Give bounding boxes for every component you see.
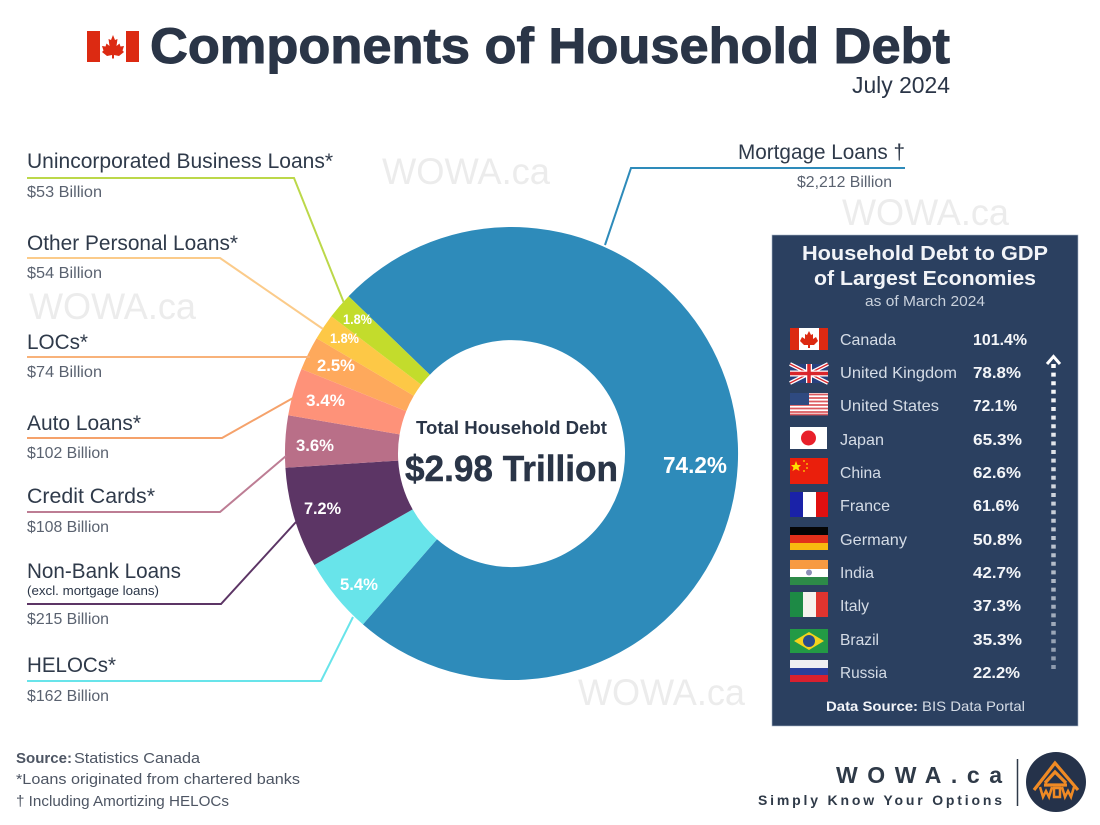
label: other personal loans xyxy=(27,232,323,329)
percentage labels: 74.2% xyxy=(663,452,727,478)
label: LOCs xyxy=(27,331,310,381)
label: non-bank loans: (excl. mortgage loans) xyxy=(27,583,159,598)
segment: unincorporated business loans xyxy=(331,296,430,385)
label: LOCs: LOCs* xyxy=(27,331,88,354)
label: non-bank loans xyxy=(27,522,296,628)
panel heading: Household Debt to GDP xyxy=(802,243,1048,265)
segment: other personal loans xyxy=(317,316,421,396)
watermarks xyxy=(29,151,1009,713)
title: Components of Household Debt xyxy=(150,18,950,74)
row: India: 42.7% xyxy=(973,565,1021,582)
row: United States xyxy=(790,393,1017,415)
panel heading: of Largest Economies xyxy=(814,268,1036,290)
watermarks: WOWA.ca xyxy=(842,192,1009,233)
label: non-bank loans: Non-Bank Loans xyxy=(27,560,181,583)
logo: WOWA.ca: Simply Know Your Options xyxy=(758,792,1002,808)
row: India xyxy=(790,560,1021,585)
logo: WOWA.ca xyxy=(758,752,1086,812)
row: Brazil: 35.3% xyxy=(973,632,1022,649)
row: United States: 72.1% xyxy=(973,398,1017,415)
row: Italy: 37.3% xyxy=(973,598,1021,615)
row: Italy xyxy=(790,592,1021,617)
subtitle date: July 2024 xyxy=(852,72,950,98)
row: Germany: Germany xyxy=(840,532,907,549)
donut centre total: Total Household Debt xyxy=(416,418,607,438)
row: France: 61.6% xyxy=(973,498,1019,515)
donut centre total xyxy=(405,418,618,489)
footnotes: *Loans originated from chartered banks xyxy=(16,771,300,788)
data source: Data Source: xyxy=(826,698,918,714)
row: Germany xyxy=(790,527,1022,550)
label: other personal loans: $54 Billion xyxy=(27,265,102,282)
row: Canada: Canada xyxy=(840,332,896,349)
percentage labels: 7.2% xyxy=(304,499,341,518)
label: mortgage loans: $2,212 Billion xyxy=(797,174,892,191)
panel heading xyxy=(802,243,1048,310)
row: Russia: 22.2% xyxy=(973,665,1020,682)
footnotes: Source: xyxy=(16,750,72,767)
label: credit cards xyxy=(27,456,286,536)
label: LOCs: $74 Billion xyxy=(27,364,102,381)
label: unincorporated business loans: $53 Billion xyxy=(27,184,102,201)
panel heading: as of March 2024 xyxy=(865,294,985,310)
row: Italy: Italy xyxy=(840,598,869,615)
row: Brazil: Brazil xyxy=(840,632,879,649)
segment: non-bank loans xyxy=(285,461,413,565)
segment: auto loans xyxy=(288,369,406,434)
data source: BIS Data Portal xyxy=(922,698,1025,714)
row: Brazil xyxy=(790,629,1022,653)
row: Japan: 65.3% xyxy=(973,432,1022,449)
percentage labels xyxy=(296,312,727,594)
segment: HELOCs xyxy=(314,509,437,624)
label: auto loans xyxy=(27,398,293,462)
segment: credit cards xyxy=(285,415,400,468)
row: India: India xyxy=(840,565,874,582)
label: unincorporated business loans: Unincorporated Business Loans* xyxy=(27,150,333,173)
row: France xyxy=(790,492,1019,517)
donut chart xyxy=(285,227,738,680)
row: China xyxy=(790,458,1021,484)
panel: household debt to GDP xyxy=(772,235,1078,726)
label: HELOCs xyxy=(27,617,353,705)
watermarks: WOWA.ca xyxy=(382,151,550,192)
label: credit cards: Credit Cards* xyxy=(27,485,155,508)
row: Japan: Japan xyxy=(840,432,884,449)
label: unincorporated business loans xyxy=(27,150,344,303)
row: Japan xyxy=(790,427,1022,449)
footnotes: Statistics Canada xyxy=(74,750,201,767)
row: Canada xyxy=(790,328,1027,350)
logo: WOWA.ca: WOWA.ca xyxy=(836,762,1002,788)
label: mortgage loans xyxy=(605,141,905,245)
percentage labels: 1.8% xyxy=(330,331,359,346)
row: Canada: 101.4% xyxy=(973,332,1027,349)
segment: mortgage loans xyxy=(349,227,738,680)
percentage labels: 1.8% xyxy=(343,312,372,327)
label: other personal loans: Other Personal Loans* xyxy=(27,232,238,255)
watermarks: WOWA.ca xyxy=(29,286,196,327)
label: HELOCs: $162 Billion xyxy=(27,688,109,705)
footnotes xyxy=(16,750,300,810)
segment: LOCs xyxy=(301,338,414,411)
percentage labels: 3.6% xyxy=(296,436,334,455)
row: Russia xyxy=(790,660,1020,682)
row: Germany: 50.8% xyxy=(973,532,1022,549)
row: United Kingdom xyxy=(790,364,1021,383)
donut centre total: $2.98 Trillion xyxy=(405,448,618,489)
label: auto loans: $102 Billion xyxy=(27,445,109,462)
row: United States: United States xyxy=(840,398,939,415)
data source xyxy=(826,698,1025,714)
row: United Kingdom: 78.8% xyxy=(973,365,1021,382)
percentage labels: 3.4% xyxy=(306,391,345,410)
row: China: China xyxy=(840,465,881,482)
icon: Canadian flag xyxy=(87,31,139,62)
label: auto loans: Auto Loans* xyxy=(27,412,141,435)
footnotes: † Including Amortizing HELOCs xyxy=(16,793,229,810)
label: HELOCs: HELOCs* xyxy=(27,654,116,677)
label: credit cards: $108 Billion xyxy=(27,519,109,536)
label: mortgage loans: Mortgage Loans † xyxy=(738,141,905,164)
percentage labels: 2.5% xyxy=(317,356,355,375)
arrow: dotted ranking arrow xyxy=(1047,356,1060,669)
percentage labels: 5.4% xyxy=(340,575,378,594)
row: Russia: Russia xyxy=(840,665,887,682)
row: China: 62.6% xyxy=(973,465,1021,482)
row: United Kingdom: United Kingdom xyxy=(840,365,957,382)
watermarks: WOWA.ca xyxy=(578,672,745,713)
row: France: France xyxy=(840,498,890,515)
label: non-bank loans: $215 Billion xyxy=(27,611,109,628)
